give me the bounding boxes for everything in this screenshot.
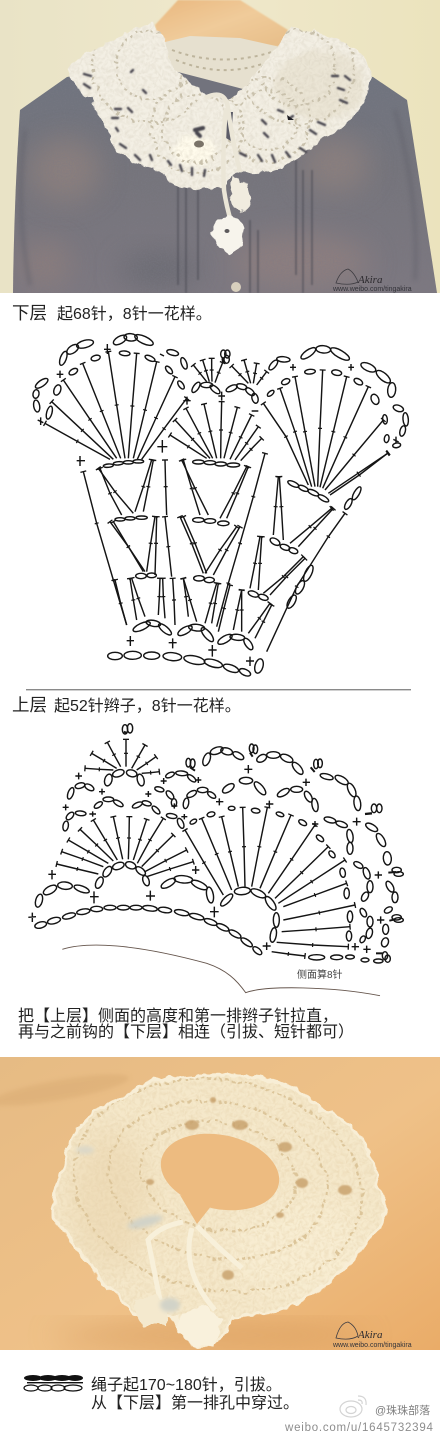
grey shirt body	[0, 50, 440, 293]
watermark: url: weibo.com/u/1645732394	[284, 1422, 434, 1434]
gap between cords	[226, 112, 233, 141]
tie cord	[205, 95, 240, 225]
divider line	[26, 689, 411, 690]
instruction text: cord: 绳子起170~180针，引拔。	[91, 1376, 282, 1394]
watermark: Akira	[357, 274, 383, 286]
heading: lower layer: 起68针，8针一花样。	[57, 305, 212, 323]
openwork holes	[146, 1097, 352, 1280]
fan 3	[263, 370, 388, 495]
hand-drawn outline	[62, 945, 380, 996]
foundation chain	[34, 905, 263, 956]
big fan right	[185, 807, 355, 956]
fan rings	[90, 28, 356, 174]
watermark: www.weibo.com/tingakira	[332, 1342, 412, 1349]
photo: collar on grey shirt	[0, 0, 440, 293]
back collar	[165, 36, 280, 90]
small fan left	[57, 739, 193, 877]
instruction text: join layers: 再与之前钩的【下层】相连（引拔、短针都可）	[18, 1023, 354, 1041]
heading: upper layer: 上层	[12, 695, 47, 715]
watermark: Akira	[357, 1329, 383, 1341]
watermark: www.weibo.com/tingakira	[332, 286, 412, 293]
icon: cord chain symbol	[24, 1375, 83, 1391]
watermark: account name: @珠珠部落	[375, 1403, 430, 1417]
photo: finished collar on wooden table	[0, 1056, 440, 1355]
heading: upper layer: 起52针辫子，8针一花样。	[54, 697, 241, 715]
shirt neck triangle	[178, 72, 242, 90]
instruction text: join layers: 把【上层】侧面的高度和第一排辫子针拉直，	[18, 1007, 338, 1025]
watermark	[332, 269, 412, 293]
label: side counts as 8 stitches: 侧面算8针	[297, 968, 343, 981]
stitch rings	[72, 1076, 365, 1295]
flower pompoms	[209, 176, 252, 254]
cream ties and flowers	[76, 1146, 242, 1347]
collar body	[50, 1072, 388, 1349]
collar holes	[84, 70, 350, 176]
fan 2	[170, 358, 267, 461]
foundation chain	[108, 619, 265, 678]
neck hole	[160, 1134, 280, 1224]
instruction text: cord: 从【下层】第一排孔中穿过。	[91, 1394, 299, 1412]
heading: lower layer: 下层	[12, 303, 47, 323]
wooden hanger	[155, 0, 288, 47]
row chains	[77, 440, 363, 610]
crochet collar	[68, 22, 372, 190]
icon: weibo watermark logo	[340, 1396, 366, 1417]
stitches: rows	[83, 453, 345, 652]
chart: upper layer crochet diagram	[28, 724, 403, 996]
watermark	[332, 1322, 412, 1349]
shirt button	[231, 282, 241, 292]
chart: lower layer crochet diagram	[32, 332, 409, 678]
fan 1	[45, 352, 187, 459]
